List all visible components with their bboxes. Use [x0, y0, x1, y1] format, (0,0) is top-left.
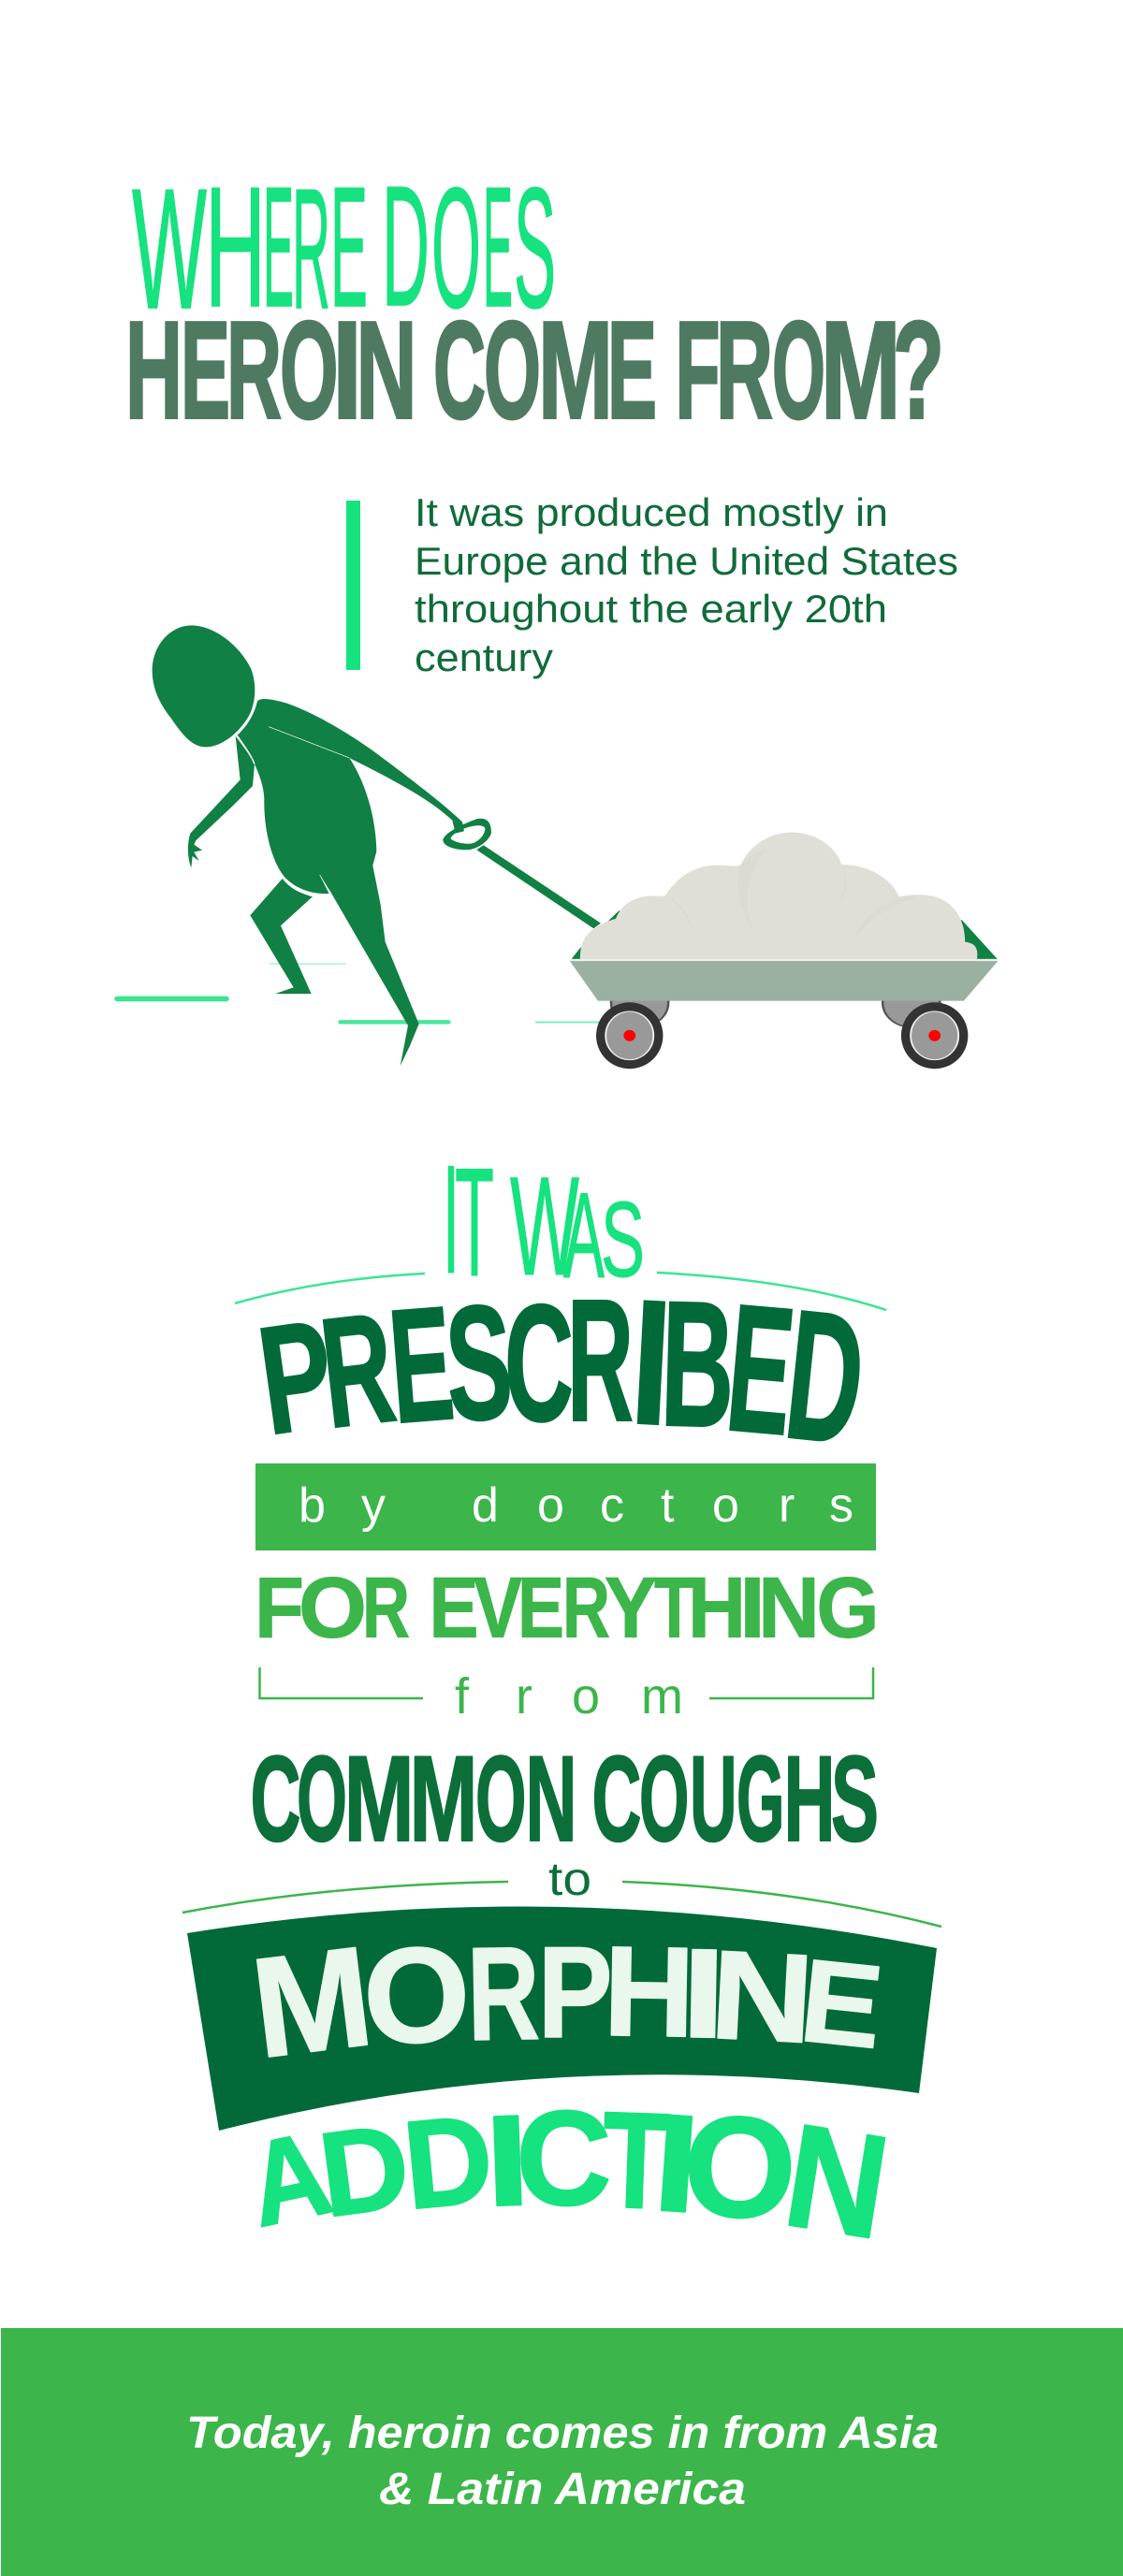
heading: common coughs: G — [737, 1730, 784, 1867]
title line: where does: W — [132, 153, 207, 344]
title line: heroin come from: O — [484, 294, 541, 447]
heading: addiction: A — [237, 2105, 342, 2251]
word: morphine: M — [244, 1916, 380, 2088]
heading: for everything: Y — [605, 1561, 657, 1656]
heading: addiction: I — [483, 2088, 532, 2234]
bracket with word: from — [260, 1667, 873, 1725]
heading: prescribed: R — [567, 1264, 634, 1458]
heading: prescribed: E — [384, 1272, 459, 1457]
word: morphine: H — [603, 1920, 695, 2065]
figure — [153, 625, 601, 1066]
title line: heroin come from: O — [772, 294, 825, 447]
heading: it was: S — [601, 1181, 645, 1300]
heading: for everything: E — [429, 1561, 479, 1656]
heading: prescribed: C — [504, 1270, 574, 1456]
footer text: & Latin America — [379, 2465, 746, 2514]
heading: addiction: N — [775, 2093, 898, 2271]
banner: by doctors: by doctors — [0, 1478, 853, 1533]
text block: production history: Europe and the United States — [415, 539, 958, 583]
heading: common coughs: O — [639, 1730, 689, 1867]
title line: where does — [132, 150, 556, 344]
heading: common coughs: N — [526, 1730, 576, 1867]
word: morphine: O — [360, 1917, 473, 2073]
title line: heroin come from: O — [280, 294, 339, 447]
heading: prescribed — [249, 1263, 873, 1483]
heading: for everything: G — [816, 1561, 880, 1656]
heading: it was: W — [510, 1147, 579, 1304]
cart handle — [443, 819, 601, 928]
title line: where does: E — [483, 151, 513, 342]
accent bar — [346, 501, 360, 670]
title — [125, 150, 944, 447]
heading: for everything: O — [299, 1561, 367, 1656]
footer band — [1, 2328, 1123, 2576]
heading: addiction: I — [649, 2085, 705, 2242]
heading: addiction: C — [516, 2083, 611, 2234]
title: S — [514, 152, 556, 343]
title line: heroin come from: I — [332, 294, 362, 447]
heading: for everything: R — [562, 1561, 610, 1656]
heading: prescribed: P — [249, 1288, 343, 1467]
title line: heroin come from: M — [538, 294, 613, 447]
text block: production history — [415, 490, 958, 679]
heading: common coughs: O — [475, 1730, 526, 1867]
heading: common coughs: M — [344, 1730, 415, 1867]
heading: for everything: I — [739, 1561, 766, 1656]
front wheel right — [901, 1002, 968, 1069]
title line: where does: O — [431, 152, 481, 343]
heading: prescribed: R — [314, 1280, 402, 1462]
title line: heroin come from: R — [226, 294, 282, 447]
arc lines: to — [182, 1882, 941, 1927]
banner: by doctors — [0, 1463, 876, 1550]
heading: addiction: O — [681, 2086, 799, 2249]
cart — [570, 832, 998, 1069]
word: morphine: R — [466, 1919, 541, 2069]
heading: addiction: T — [600, 2083, 672, 2237]
title line: heroin come from: F — [676, 294, 721, 447]
text block: production history: It was produced mostly in — [415, 490, 888, 534]
heading: addiction — [237, 2083, 898, 2271]
word: morphine: N — [707, 1924, 817, 2070]
word: morphine — [244, 1916, 888, 2088]
title line: where does: E — [263, 151, 294, 342]
heading: prescribed: B — [659, 1264, 737, 1465]
body highlights — [237, 727, 349, 895]
body, pulling arm and front leg — [237, 699, 464, 1066]
back arm — [188, 736, 255, 867]
title line: heroin come from: E — [181, 294, 230, 447]
heading: common coughs: O — [297, 1730, 347, 1867]
heading: for everything: R — [362, 1561, 410, 1656]
title line: where does: H — [205, 151, 266, 342]
heading: for everything: E — [518, 1561, 564, 1656]
text block: production history: throughout the early 20th — [415, 587, 887, 631]
heading: common coughs: U — [690, 1730, 737, 1867]
powder pile — [580, 832, 977, 959]
word: morphine: P — [538, 1920, 613, 2065]
text block: production history: century — [415, 635, 553, 679]
heading: it was: T — [455, 1136, 494, 1308]
bracket with word: from: from — [455, 1668, 683, 1725]
cart body — [570, 959, 998, 1001]
title line: heroin come from: H — [125, 294, 182, 447]
title line: heroin come from: C — [433, 294, 486, 447]
front wheel left — [596, 1002, 663, 1069]
heading: common coughs: C — [591, 1730, 642, 1867]
title line: heroin come from: R — [716, 294, 773, 447]
back leg — [250, 878, 313, 994]
heading: addiction: D — [398, 2088, 499, 2236]
footer text: Today, heroin comes in from Asia — [186, 2409, 939, 2458]
word: morphine: I — [679, 1922, 727, 2065]
heading: common coughs: H — [784, 1730, 835, 1867]
heading: prescribed: S — [442, 1270, 517, 1455]
title line: heroin come from: ? — [893, 294, 944, 447]
heading: for everything: V — [474, 1561, 522, 1656]
title line: where does: E — [330, 151, 368, 342]
heading: common coughs — [251, 1730, 879, 1867]
heading: common coughs: S — [831, 1730, 879, 1867]
heading: for everything: H — [688, 1561, 746, 1656]
title line: where does: D — [382, 150, 430, 342]
cart interior — [571, 910, 998, 959]
banner: morphine — [187, 1907, 937, 2131]
title line: heroin come from: E — [607, 294, 657, 447]
heading: prescribed: I — [626, 1263, 676, 1463]
heading: it was: I — [443, 1133, 459, 1305]
title line: heroin come from — [125, 294, 944, 447]
heading: for everything — [255, 1561, 880, 1656]
heading: it was — [443, 1133, 645, 1308]
heading: it was: A — [563, 1167, 605, 1303]
title line: heroin come from: M — [821, 294, 900, 447]
arc lines: it was — [235, 1273, 886, 1310]
heading: prescribed: D — [778, 1271, 873, 1483]
word: to: to — [548, 1853, 591, 1905]
speed lines — [114, 963, 601, 1024]
heading: for everything: T — [654, 1561, 694, 1656]
illustration: figure pulling cart — [114, 625, 998, 1069]
heading: addiction: D — [313, 2099, 417, 2243]
heading: prescribed: E — [720, 1266, 801, 1474]
word: morphine: E — [795, 1934, 888, 2074]
title line: where does: R — [292, 153, 330, 344]
rear wheels — [611, 978, 940, 1027]
heading: for everything: N — [758, 1561, 820, 1656]
heading: common coughs: M — [410, 1730, 477, 1867]
head — [153, 625, 255, 747]
title line: heroin come from: N — [356, 294, 417, 447]
heading: for everything: F — [255, 1561, 304, 1656]
heading: common coughs: C — [251, 1730, 301, 1867]
footer text — [186, 2409, 939, 2514]
